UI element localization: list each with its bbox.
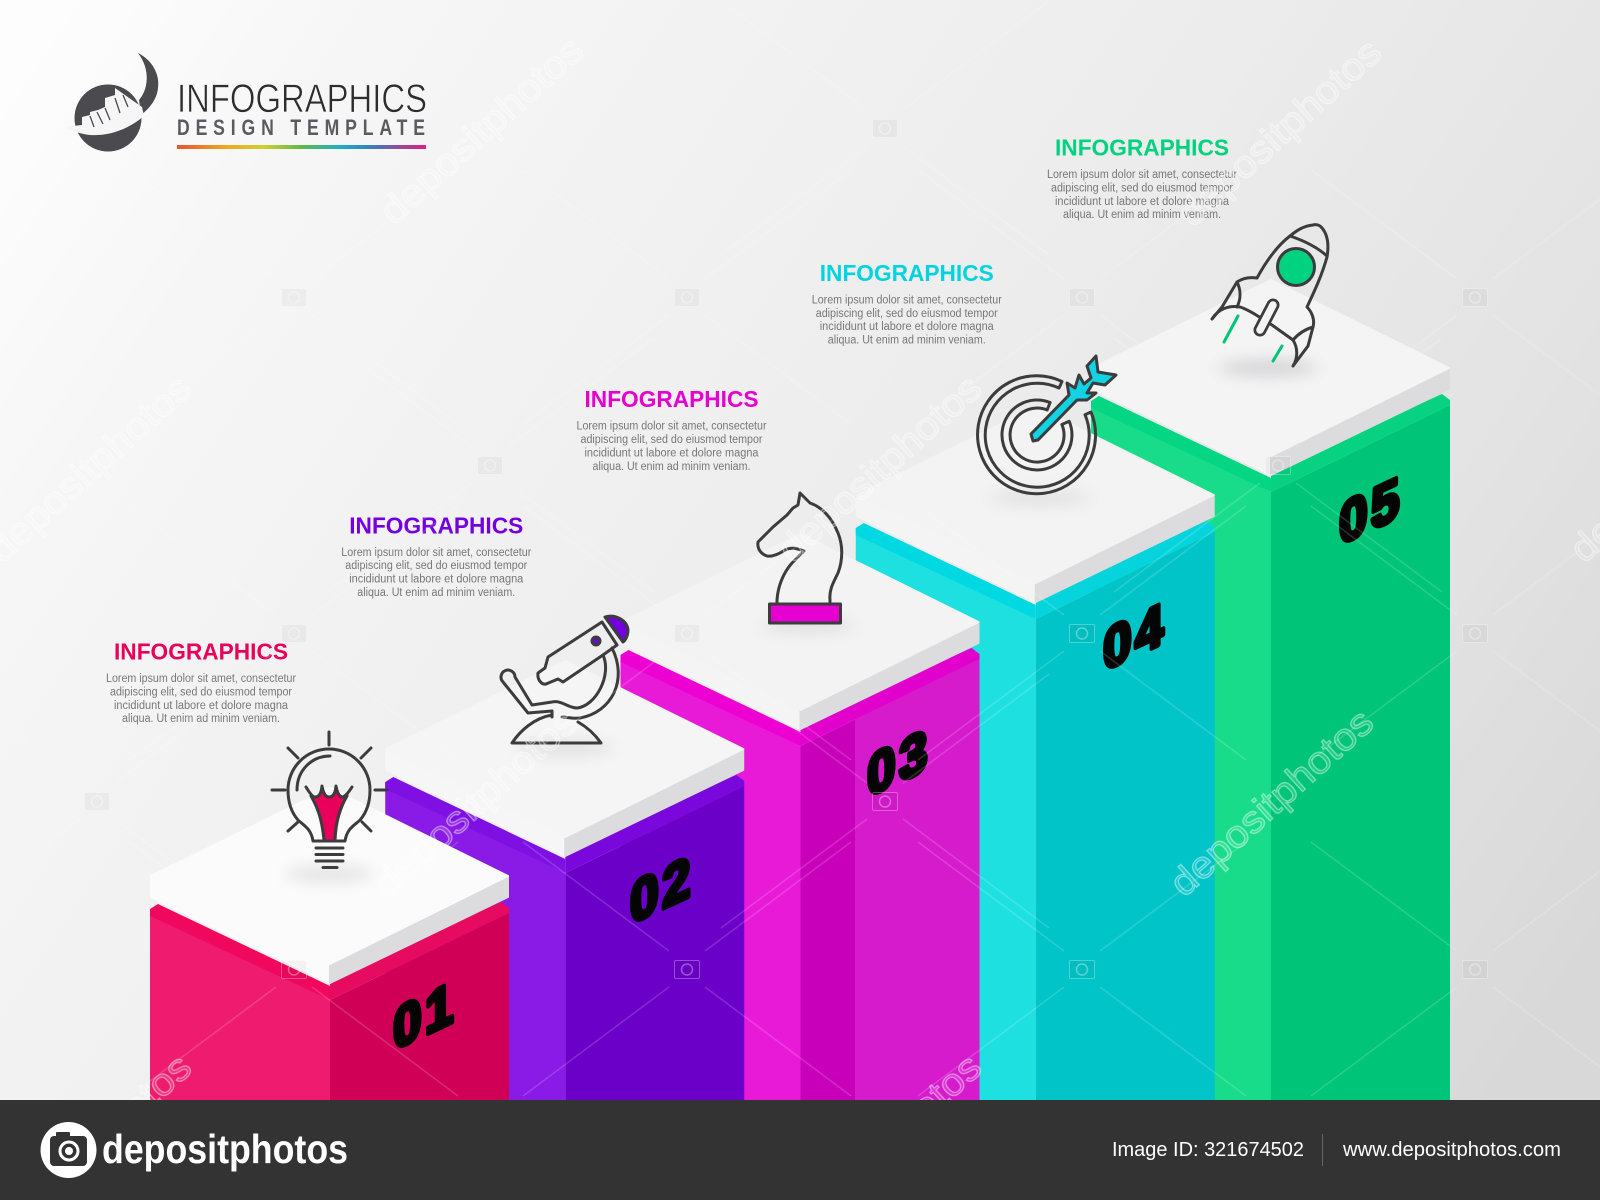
bar 4 top plate	[857, 407, 1214, 602]
body text 1: aliqua. Ut enim ad minim veniam.	[122, 713, 280, 725]
footer brand name: depositphotos	[102, 1126, 348, 1172]
watermark: depositphotos	[366, 701, 586, 905]
body text 1	[106, 673, 296, 725]
logo icon	[64, 53, 158, 152]
bar 1 right face	[330, 913, 509, 1100]
body text 4: adipiscing elit, sed do eiusmod tempor	[816, 308, 998, 320]
text block 1	[106, 638, 296, 725]
bar 2 right face	[565, 786, 744, 1100]
body text 4	[812, 294, 1002, 347]
bar 1 left face	[150, 909, 330, 1100]
body text 5	[1047, 169, 1237, 221]
body text 1: Lorem ipsum dolor sit amet, consectetur	[106, 673, 296, 685]
bar 3 top plate	[622, 534, 978, 729]
body text 2: Lorem ipsum dolor sit amet, consectetur	[341, 547, 531, 559]
rainbow rule	[177, 145, 426, 149]
icon: rocket	[1212, 225, 1328, 375]
body text 2: adipiscing elit, sed do eiusmod tempor	[345, 560, 527, 572]
number 04: 04	[1103, 589, 1167, 684]
icon: microscope	[501, 616, 628, 755]
bar 3 right face	[800, 659, 980, 1100]
footer bar	[0, 1100, 1600, 1200]
logo	[64, 53, 427, 152]
website url: www.depositphotos.com	[1342, 1139, 1561, 1161]
body text 3: incididunt ut labore et dolore magna	[584, 447, 759, 459]
icon: target with dart	[978, 356, 1116, 505]
heading 2: INFOGRAPHICS	[349, 512, 523, 538]
number 05: 05	[1339, 463, 1403, 558]
bar 2 left face	[385, 782, 565, 1100]
bar 4 left face	[856, 528, 1036, 1100]
body text 3: aliqua. Ut enim ad minim veniam.	[592, 461, 750, 473]
bar 3	[620, 534, 980, 1100]
heading 1: INFOGRAPHICS	[114, 638, 288, 664]
number 01: 01	[393, 968, 457, 1063]
number 03: 03	[867, 715, 931, 810]
body text 3: Lorem ipsum dolor sit amet, consectetur	[576, 421, 767, 433]
watermark: depositphotos	[372, 29, 592, 233]
logo title: INFOGRAPHICS	[177, 77, 427, 121]
text block 5	[1047, 134, 1237, 221]
bar 2	[385, 661, 744, 1100]
body text 1: incididunt ut labore et dolore magna	[114, 700, 289, 712]
bar 2 top plate	[386, 661, 743, 856]
heading 5: INFOGRAPHICS	[1055, 134, 1229, 160]
body text 5: adipiscing elit, sed do eiusmod tempor	[1051, 182, 1233, 194]
body text 1: adipiscing elit, sed do eiusmod tempor	[110, 686, 292, 698]
bar 5 top plate	[1092, 280, 1449, 475]
watermark: depositphotos	[1170, 31, 1390, 235]
body text 4: incididunt ut labore et dolore magna	[820, 321, 994, 333]
image id: Image ID: 321674502	[1112, 1139, 1304, 1161]
heading 3: INFOGRAPHICS	[584, 386, 758, 412]
body text 5: Lorem ipsum dolor sit amet, consectetur	[1047, 169, 1237, 181]
bar 3 left face	[620, 655, 800, 1100]
icon: light bulb	[272, 732, 387, 881]
body text 4: Lorem ipsum dolor sit amet, consectetur	[812, 294, 1002, 306]
watermark: depositphotos	[770, 367, 990, 571]
body text 5: aliqua. Ut enim ad minim veniam.	[1063, 209, 1221, 221]
bar 1 top plate	[151, 788, 508, 983]
body text 2	[341, 547, 531, 599]
heading 4: INFOGRAPHICS	[820, 260, 994, 286]
icon: footer camera logo	[40, 1122, 96, 1178]
logo subtitle: DESIGN TEMPLATE	[177, 116, 425, 141]
icon: chess knight	[758, 493, 856, 633]
number 02: 02	[630, 842, 694, 937]
bar 1	[150, 788, 509, 1100]
bar 4	[856, 407, 1215, 1100]
body text 3: adipiscing elit, sed do eiusmod tempor	[580, 434, 763, 446]
body text 4: aliqua. Ut enim ad minim veniam.	[828, 335, 986, 347]
body text 5: incididunt ut labore et dolore magna	[1055, 196, 1230, 208]
watermark: depositphotos	[1162, 701, 1382, 905]
bar 5	[1091, 280, 1450, 1100]
text block 2	[341, 512, 531, 599]
text block 4	[812, 260, 1002, 347]
body text 3	[576, 421, 767, 473]
text block 3	[576, 386, 767, 473]
bar 5 right face	[1271, 405, 1450, 1100]
body text 2: aliqua. Ut enim ad minim veniam.	[357, 587, 515, 599]
bar 5 left face	[1091, 401, 1271, 1100]
body text 2: incididunt ut labore et dolore magna	[349, 574, 524, 586]
bar 4 right face	[1036, 532, 1215, 1100]
